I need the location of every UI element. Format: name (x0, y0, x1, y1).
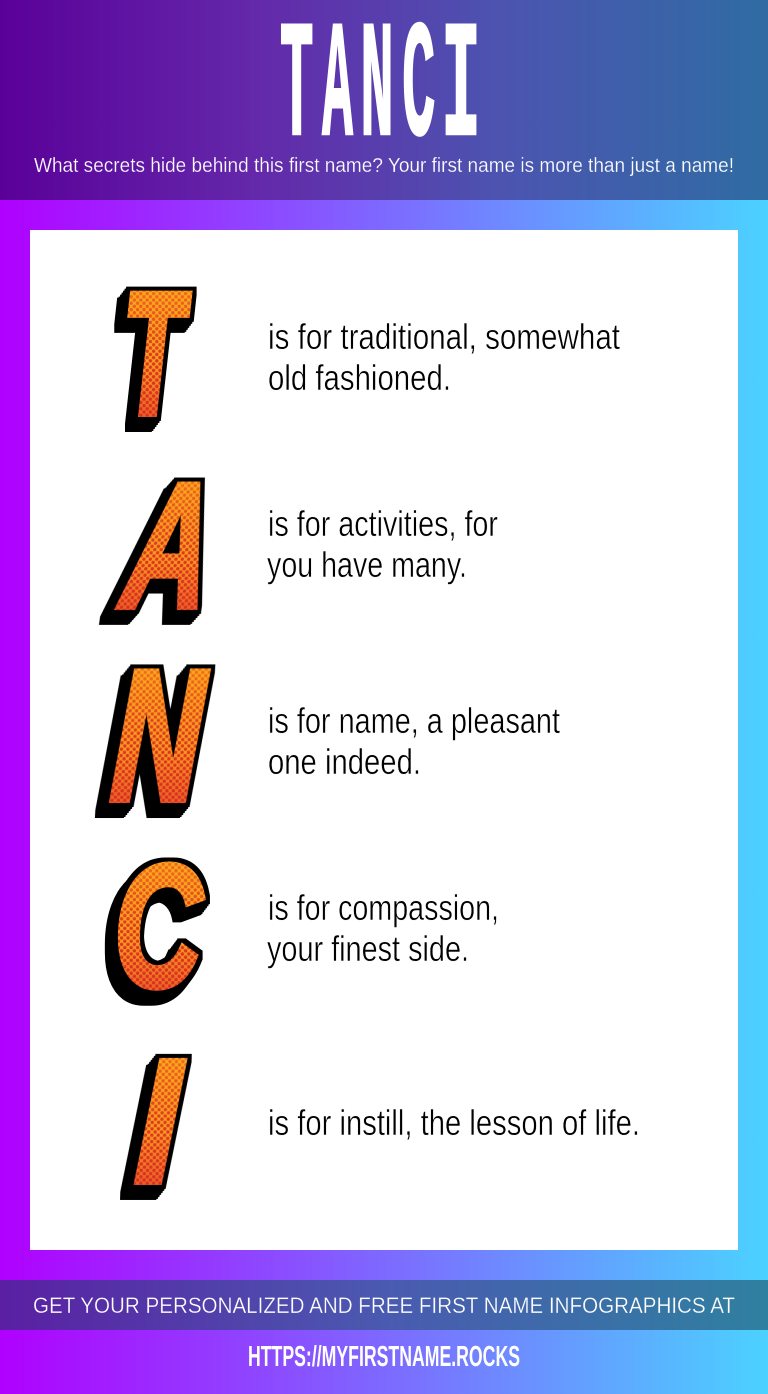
text: A meaning: you have many. (267, 544, 467, 585)
header band: I (441, 0, 481, 184)
comic letter T: T (123, 258, 190, 450)
text: I meaning: is for instill, the lesson of life. (268, 1102, 640, 1143)
text: N meaning (268, 700, 560, 782)
row: letter T (123, 258, 620, 450)
text: N meaning: is for name, a pleasant (268, 700, 560, 741)
text: A meaning (267, 503, 498, 585)
title: T (280, 0, 314, 184)
text: T meaning: is for traditional, somewhat (268, 316, 620, 357)
comic letter A: A (112, 446, 225, 645)
row: letter N (108, 633, 560, 839)
header band (0, 0, 768, 200)
white content panel (30, 230, 738, 1250)
footer url: HTTPS://MYFIRSTNAME.ROCKS (248, 1341, 520, 1373)
row: letter I (133, 1024, 640, 1220)
text: C meaning: your finest side. (267, 928, 469, 969)
comic letter N: N (108, 633, 211, 839)
text: C meaning (267, 887, 499, 969)
title (280, 0, 481, 184)
footer band (0, 1280, 768, 1330)
text: T meaning (268, 316, 620, 398)
comic letter I: I (133, 1024, 186, 1220)
title: N (360, 0, 394, 184)
title: A (322, 0, 353, 184)
subtitle: What secrets hide behind this first name? Your first name is more than just a name! (34, 155, 734, 177)
text: C meaning: is for compassion, (268, 887, 499, 928)
row: letter A (112, 446, 498, 645)
row: letter C (114, 828, 499, 1023)
text: A meaning: is for activities, for (268, 503, 498, 544)
footer call to action: GET YOUR PERSONALIZED AND FREE FIRST NAME INFOGRAPHICS AT (33, 1293, 735, 1318)
text: T meaning: old fashioned. (268, 357, 451, 398)
text: N meaning: one indeed. (268, 741, 421, 782)
title: C (402, 0, 436, 184)
comic letter C: C (114, 828, 204, 1023)
